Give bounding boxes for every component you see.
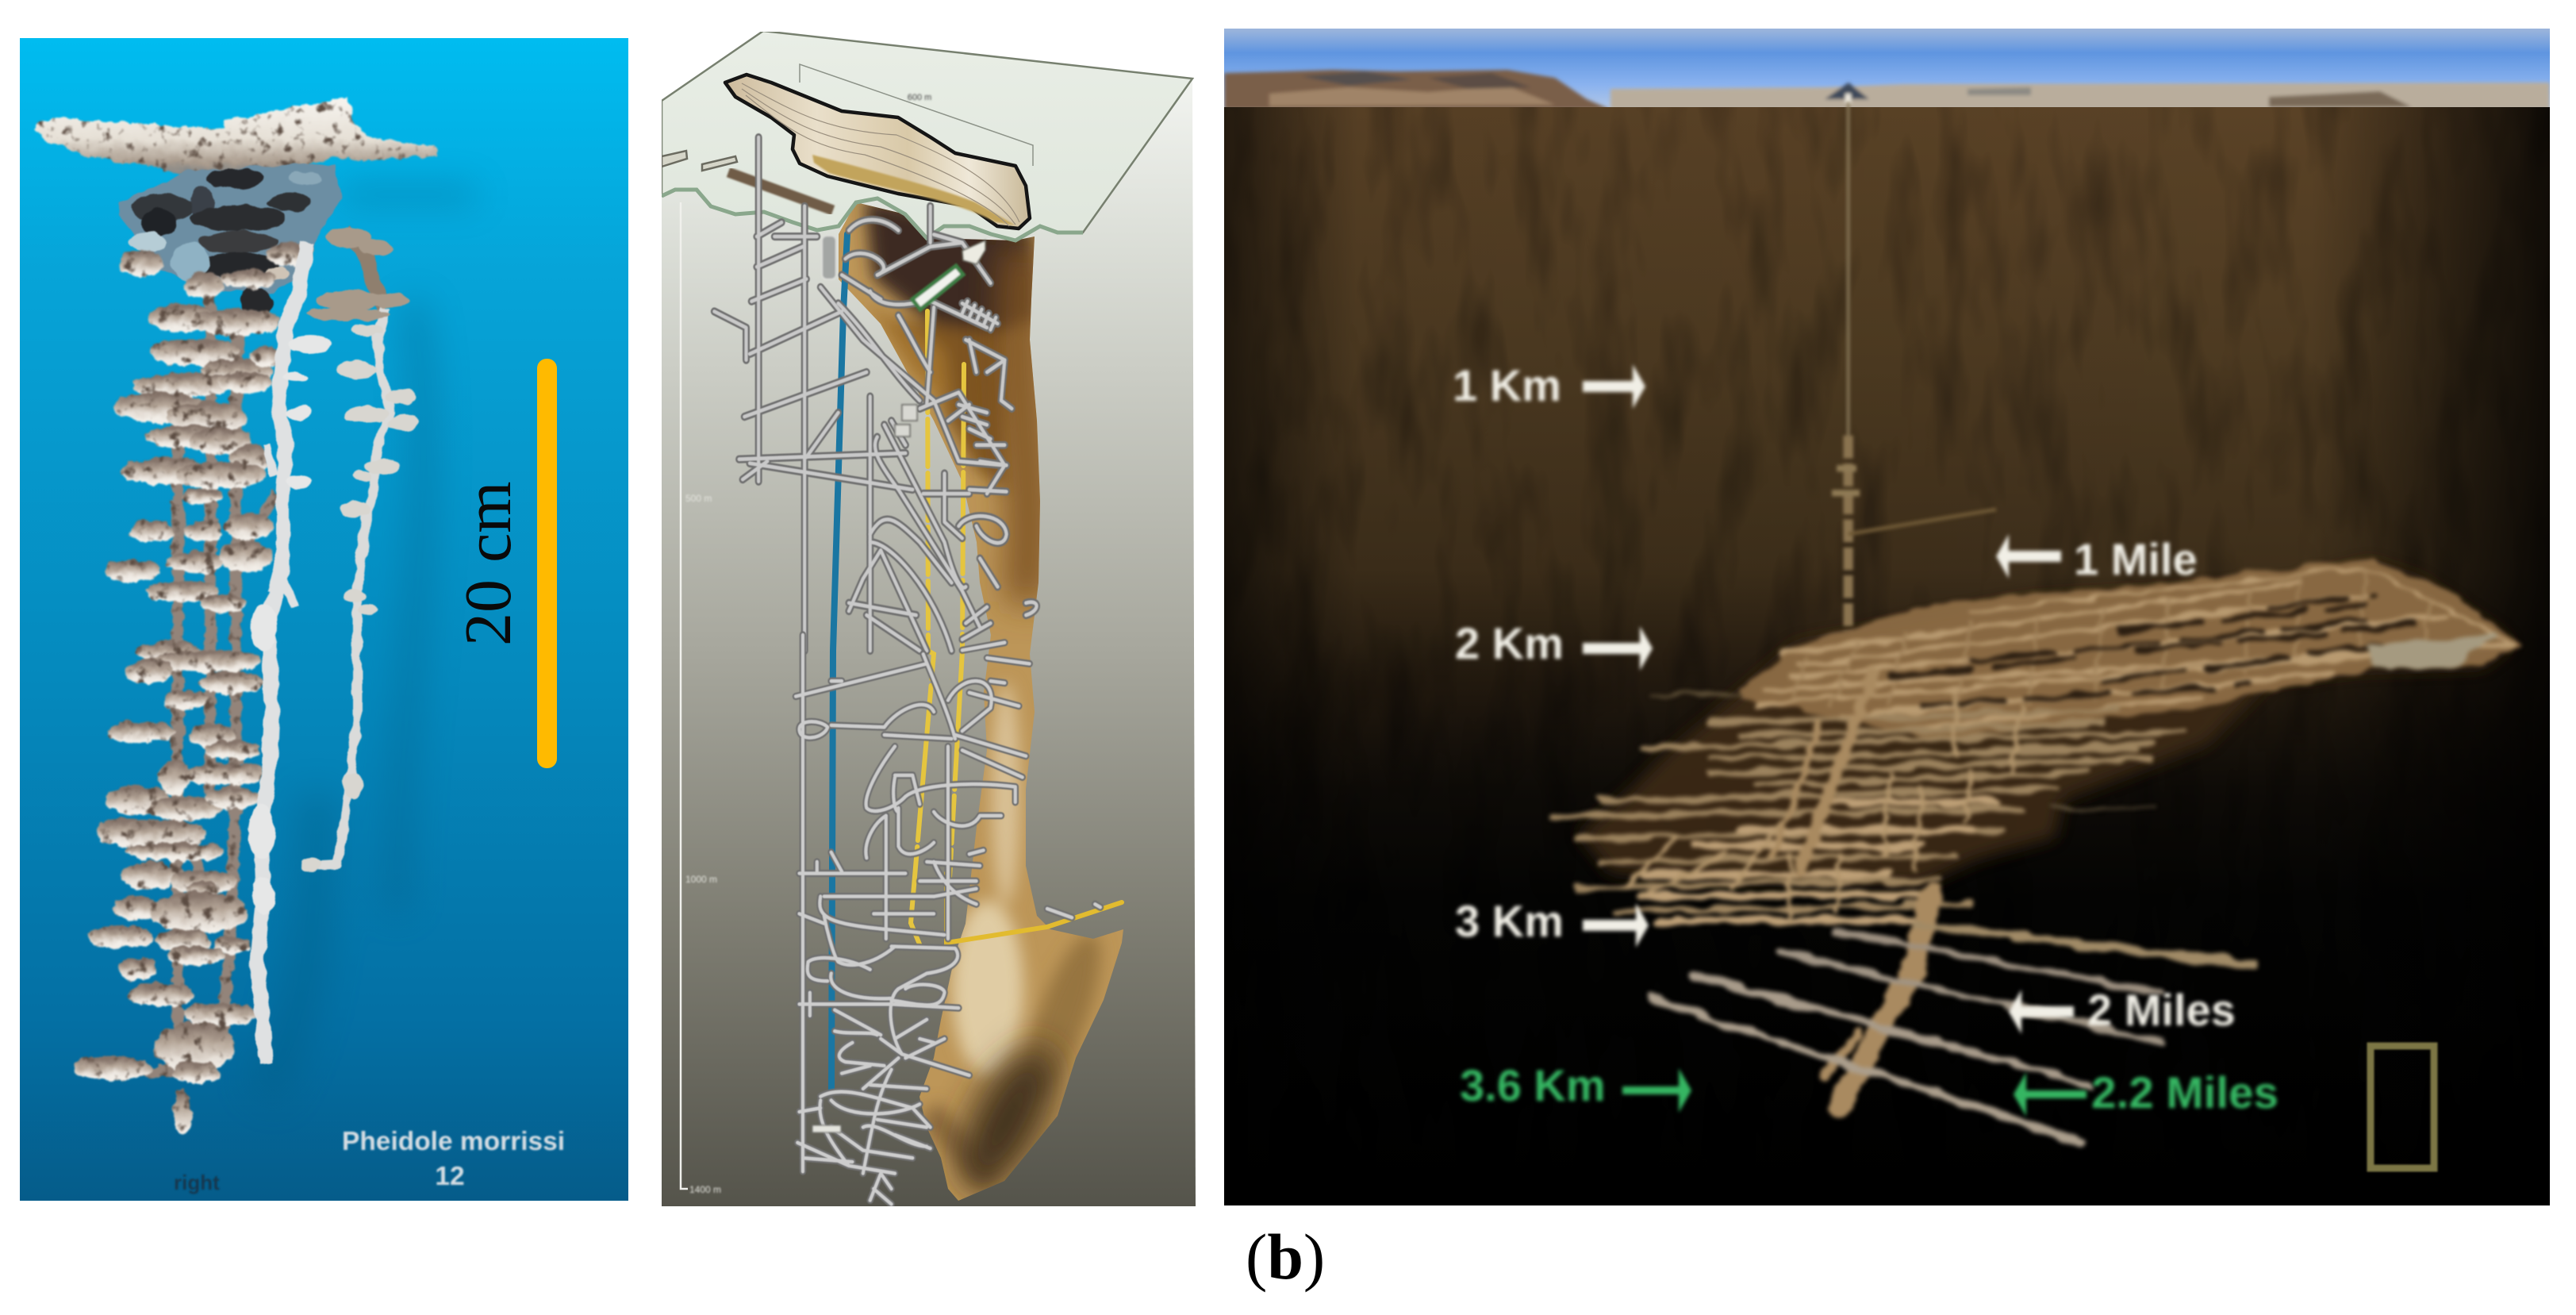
blue photo background — [20, 38, 628, 1201]
upper level wedge — [1741, 559, 2522, 740]
soil crack texture — [1224, 107, 2550, 1205]
plant buildings — [812, 236, 985, 1132]
depth label: 3 Km: 3 Km — [1455, 896, 1564, 946]
tunnels diagram — [1553, 559, 2522, 1142]
logo frame — [2371, 1046, 2434, 1168]
depth label: 1 Mile — [1996, 534, 2198, 584]
soft shadows behind the cast — [262, 194, 476, 1095]
depth label: 2 Miles: 2 Miles — [2087, 985, 2236, 1035]
panel: mine cross-section diagram — [662, 31, 1196, 1214]
sky — [1224, 29, 2550, 110]
depth labels: 1000 m — [685, 874, 717, 885]
underground soil — [1224, 107, 2550, 1205]
panel: deep mine depth section — [1224, 29, 2550, 1205]
open pit outline — [725, 75, 1030, 229]
pit width dimension line — [800, 64, 1033, 166]
depth labels: 500 m — [685, 493, 712, 504]
depth labels — [685, 493, 721, 1195]
yellow and blue shafts — [831, 234, 1122, 1093]
depth label: 2 Miles — [2009, 985, 2236, 1035]
depth scale line — [681, 202, 688, 1189]
depth label: 2 Km: 2 Km — [1455, 618, 1564, 668]
depth label: 2 Km — [1455, 618, 1653, 671]
species caption — [343, 1129, 565, 1186]
panel: ant nest cast on blue background — [20, 38, 628, 1201]
lower sloped levels — [1653, 924, 2254, 1142]
side vignette — [1224, 107, 2550, 1205]
glass surface slab — [662, 31, 1192, 240]
scale label: 20 cm — [451, 481, 525, 646]
depth label: 1 Mile: 1 Mile — [2074, 534, 2198, 584]
surface slabs at left — [662, 151, 737, 171]
depth label: 2.2 Miles — [2014, 1067, 2278, 1117]
species caption: Pheidole morrissi — [342, 1127, 565, 1156]
slab front edge highlight — [662, 190, 1083, 240]
brown streak along right edge — [1019, 246, 1029, 603]
surface slab of the nest — [33, 99, 438, 179]
grey gradient backdrop — [662, 79, 1196, 1206]
middle levels — [1553, 690, 2185, 921]
yellow scale bar — [537, 359, 557, 768]
ore body — [825, 190, 1142, 1214]
main shaft — [1832, 102, 1996, 633]
pit tailings band — [812, 155, 1015, 225]
nest column of chamber lobes — [76, 247, 311, 1132]
panel letter: (b) — [1246, 1221, 1325, 1293]
depth label: 1 Km: 1 Km — [1453, 360, 1561, 410]
dark upper chambers — [119, 163, 341, 321]
view label: right — [174, 1171, 220, 1194]
tunnels upper network — [714, 137, 1037, 651]
depth label: 2.2 Miles: 2.2 Miles — [2091, 1067, 2278, 1117]
dark lower lens — [941, 1033, 1074, 1205]
tunnels lower network — [796, 635, 1100, 1204]
lit soil around workings — [1579, 563, 2511, 886]
depth label: 3.6 Km — [1460, 1060, 1691, 1113]
species caption: 12 — [435, 1162, 465, 1191]
depth label: 1 Km — [1453, 360, 1645, 410]
pit width label: 600 m — [908, 93, 931, 102]
depth label: 3 Km — [1455, 896, 1649, 948]
distant hills — [1224, 70, 2550, 110]
depth label: 3.6 Km: 3.6 Km — [1460, 1060, 1606, 1110]
main inclined ramp — [1774, 674, 1930, 1105]
white central strand — [249, 243, 330, 1064]
pit contour lines — [742, 83, 1019, 226]
right-hand strand — [300, 227, 420, 872]
depth labels: 1400 m — [689, 1184, 721, 1195]
stockpile conveyor — [728, 172, 833, 210]
